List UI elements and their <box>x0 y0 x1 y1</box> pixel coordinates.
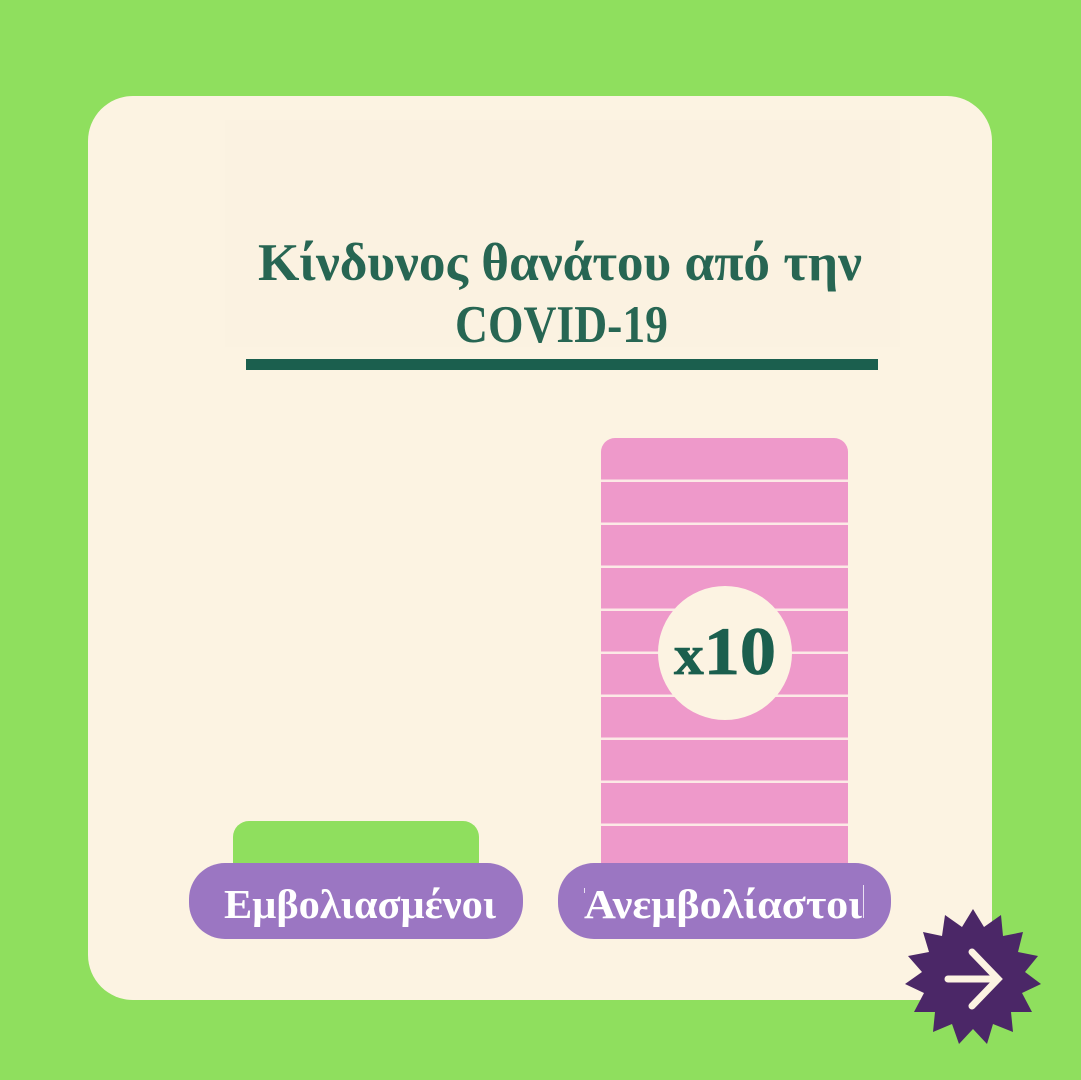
bar: unvaccinated <box>601 438 848 864</box>
title underline <box>246 359 878 370</box>
title: COVID-19 <box>455 296 668 354</box>
title <box>258 234 862 354</box>
title backdrop <box>225 120 900 347</box>
label: vaccinated <box>189 863 523 939</box>
label: unvaccinated: Ανεμβολίαστοι <box>584 881 862 927</box>
label: unvaccinated <box>558 863 891 939</box>
multiplier badge <box>658 586 792 720</box>
title: Κίνδυνος θανάτου από την <box>258 234 862 292</box>
multiplier badge: x10 <box>674 613 776 689</box>
bar: vaccinated <box>233 821 479 864</box>
label: vaccinated: Εμβολιασμένοι <box>224 881 496 927</box>
panel: main card <box>88 96 992 1000</box>
icon: next arrow badge <box>905 909 1041 1044</box>
